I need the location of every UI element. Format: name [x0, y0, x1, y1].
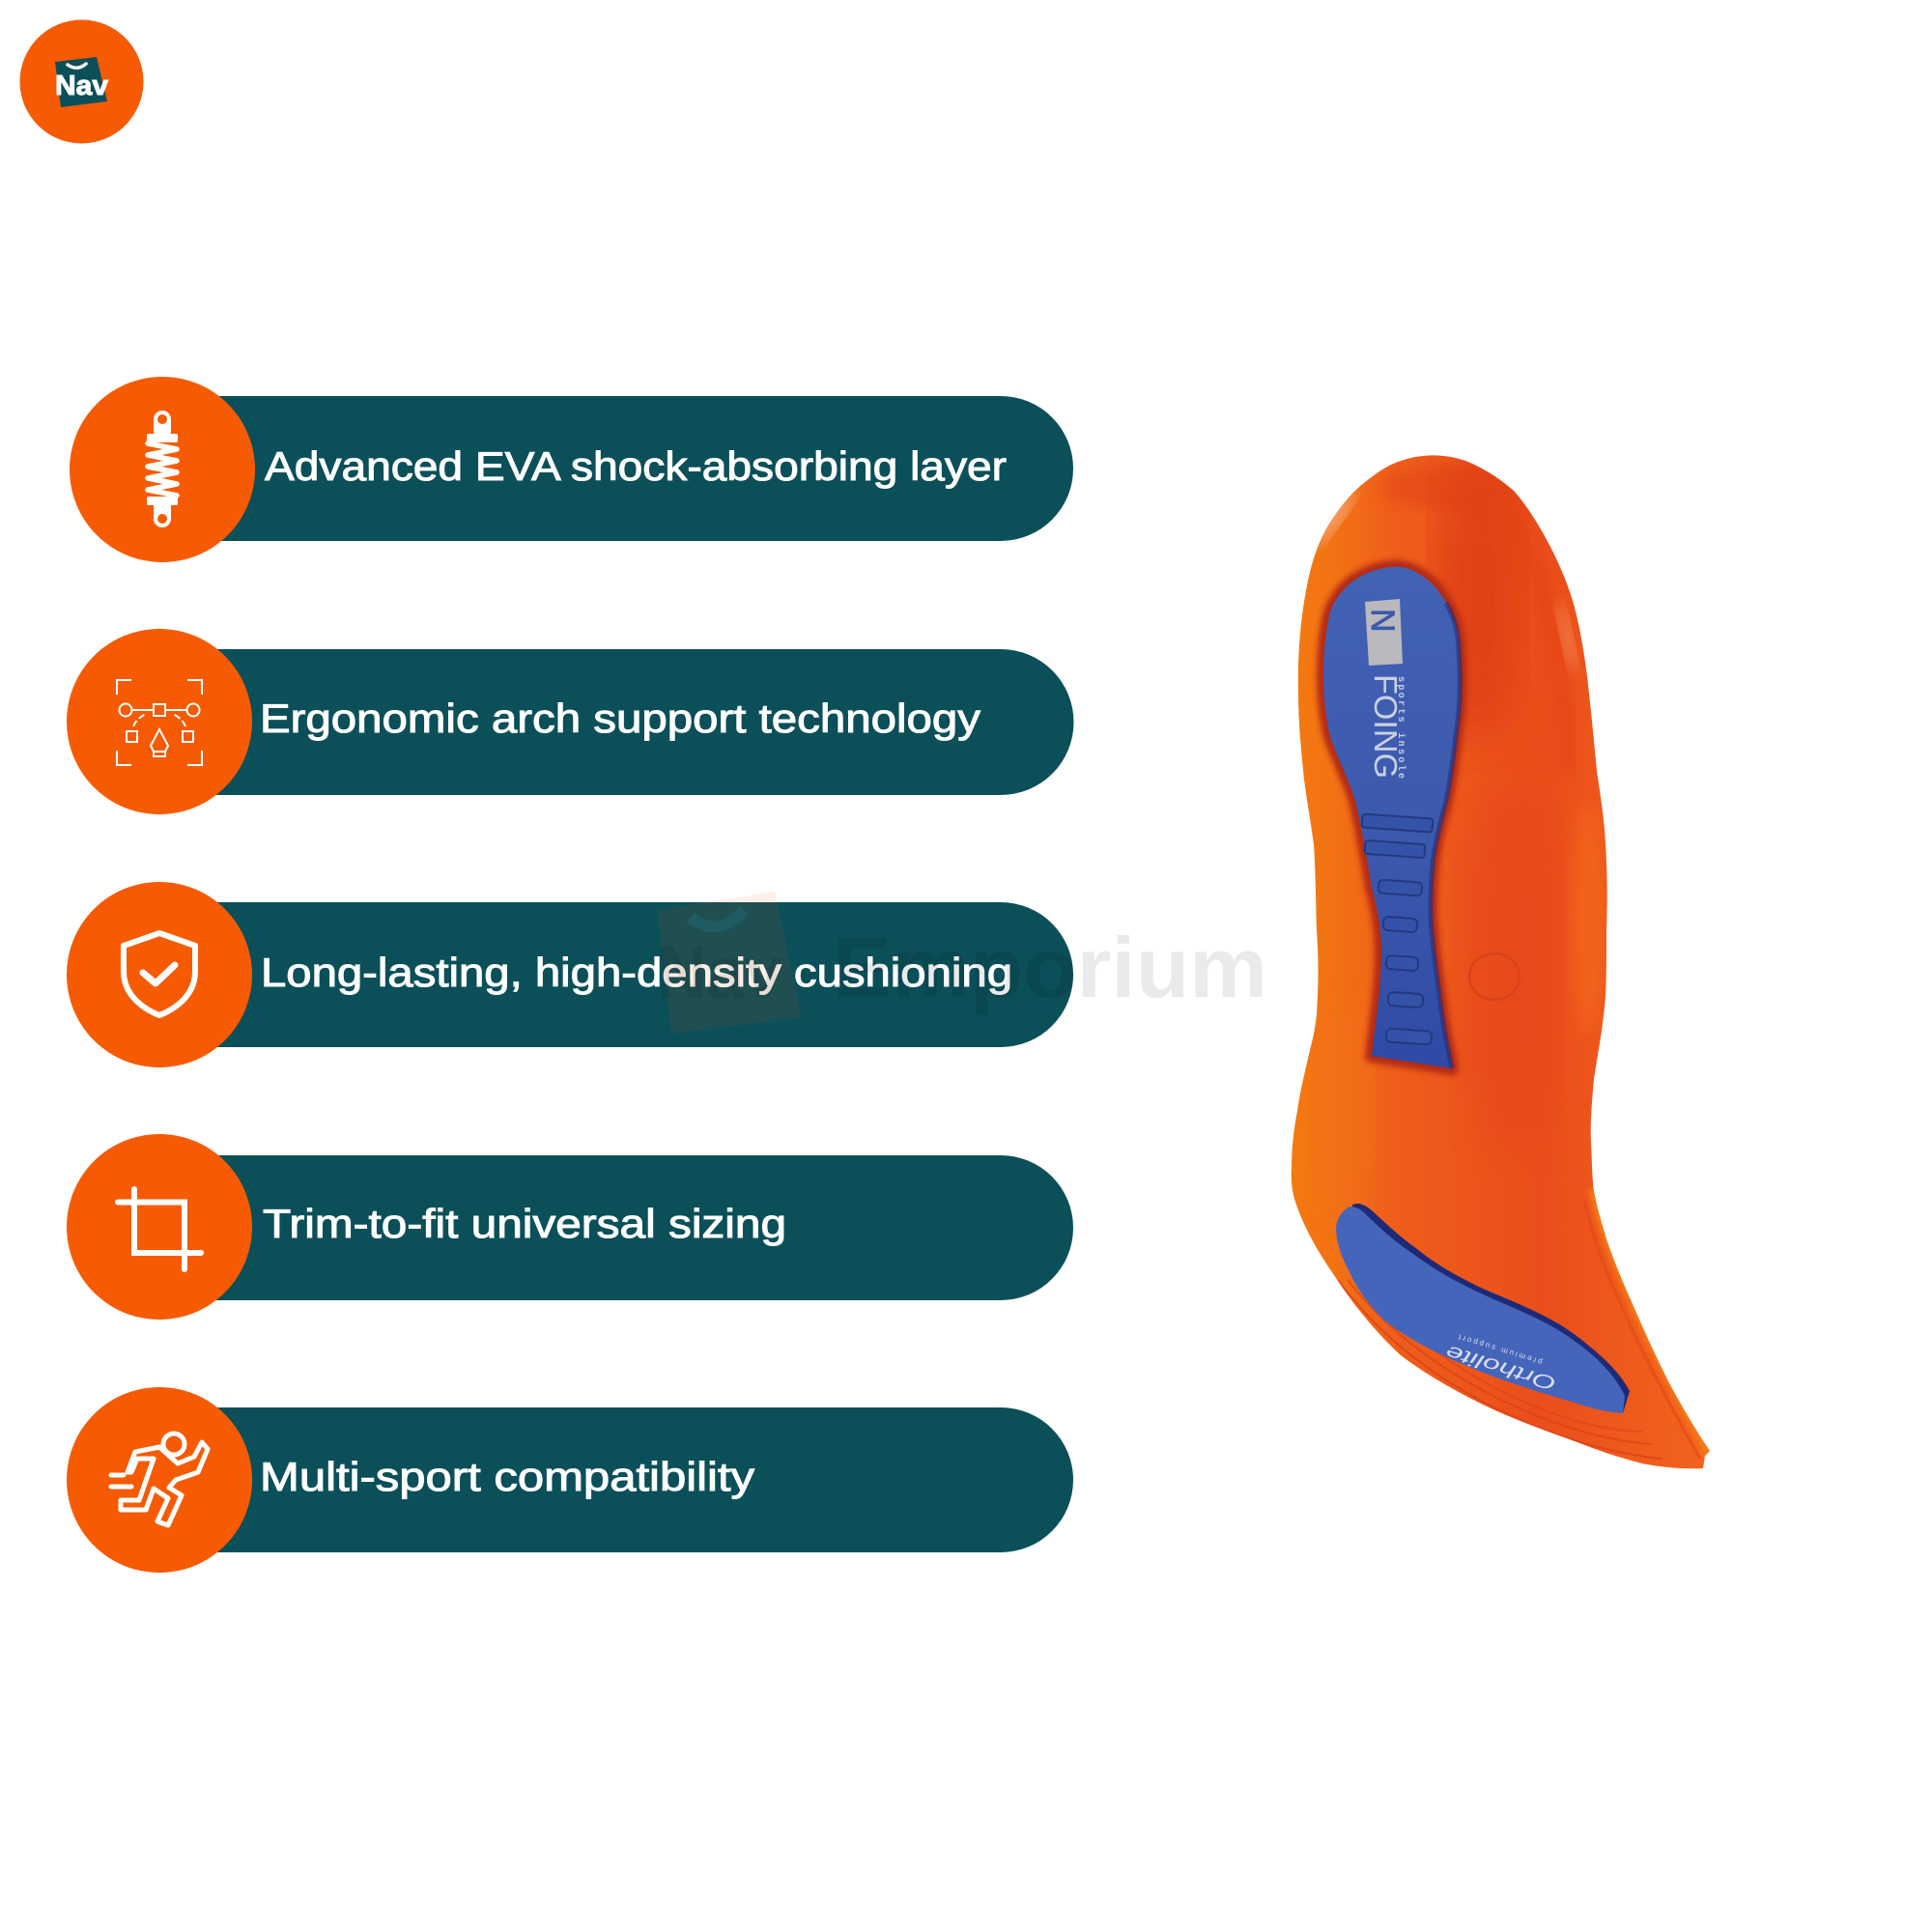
brand tag: N	[1364, 609, 1401, 633]
icon: crop	[118, 1189, 201, 1269]
feature row: trim to fit	[67, 1134, 1073, 1320]
label bar	[193, 1407, 1073, 1552]
icon: vector pen arch	[117, 680, 202, 765]
logo badge	[19, 19, 143, 143]
product photo: orange insole	[1292, 454, 1715, 1468]
feature row: arch support	[67, 629, 1074, 814]
icon: shock absorber spring	[147, 411, 178, 527]
icon circle	[67, 1134, 252, 1320]
label text: Long-lasting, high-density cushioning	[261, 950, 1012, 995]
watermark smile	[691, 910, 744, 926]
label bar	[193, 902, 1073, 1047]
heel pad text: premium support	[1457, 1332, 1544, 1366]
logo wordmark: Nav	[55, 71, 108, 101]
label text: Advanced EVA shock-absorbing layer	[265, 443, 1007, 489]
brand tagline: sports insole	[1395, 676, 1406, 779]
icon circle	[67, 1387, 252, 1573]
watermark name: Emporium	[833, 920, 1267, 1015]
icon circle	[67, 629, 252, 814]
feature row: cushioning	[67, 882, 1073, 1067]
feature row: shock-absorbing layer	[70, 377, 1073, 562]
watermark wordmark: Nav	[657, 929, 783, 1014]
label bar	[193, 649, 1074, 795]
feature row: multi-sport	[67, 1387, 1073, 1573]
icon: runner	[111, 1434, 208, 1525]
brand tag	[1364, 599, 1403, 666]
icon: shield with check	[124, 933, 195, 1015]
label text: Trim-to-fit universal sizing	[263, 1201, 786, 1246]
watermark	[657, 892, 1267, 1034]
label bar	[193, 1155, 1073, 1300]
heel pad text: Ortholite	[1443, 1341, 1558, 1394]
insole body	[1292, 455, 1710, 1468]
arch insert recess	[1323, 567, 1460, 1068]
arch insert blue	[1323, 567, 1460, 1068]
logo smile	[68, 64, 86, 68]
brand name: FOING	[1368, 674, 1404, 779]
watermark bag	[657, 892, 802, 1034]
icon circle	[67, 882, 252, 1067]
embossed emblem	[1469, 953, 1520, 1000]
insole shading	[1310, 454, 1715, 1459]
heel pad blue	[1336, 1207, 1625, 1413]
icon circle	[70, 377, 255, 562]
insert shadow edge	[1431, 603, 1460, 1068]
arch slots	[1362, 814, 1433, 1045]
heel pad text	[1443, 1330, 1562, 1394]
logo bag	[55, 57, 107, 107]
heel pad dark edge	[1352, 1204, 1630, 1413]
label bar	[193, 396, 1073, 541]
infographic canvas	[19, 19, 1710, 1573]
label text: Multi-sport compatibility	[260, 1454, 754, 1499]
label text: Ergonomic arch support technology	[260, 696, 980, 741]
